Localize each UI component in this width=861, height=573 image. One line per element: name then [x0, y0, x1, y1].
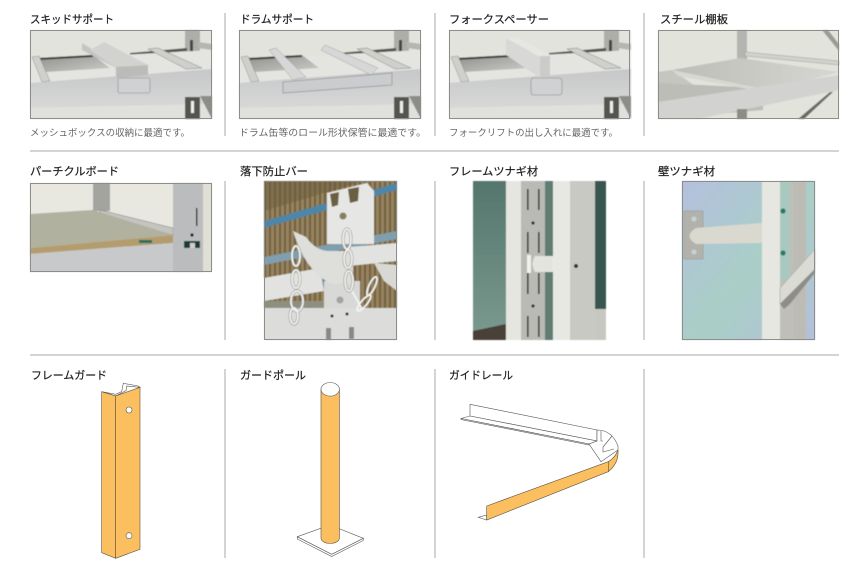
caption: メッシュボックスの収納に最適です。 [30, 127, 190, 139]
panel: drum support [239, 13, 426, 139]
panel: fork spacer [449, 13, 631, 139]
heading: ガードポール [240, 369, 306, 382]
photo: drum support [239, 30, 421, 119]
photo: fall prevention bar [264, 181, 397, 340]
heading: ガイドレール [449, 369, 513, 382]
heading: 落下防止バー [240, 164, 308, 178]
panel: fall prevention bar [240, 164, 397, 340]
heading: ドラムサポート [240, 13, 314, 26]
caption: ドラム缶等のロール形状保管に最適です。 [239, 127, 426, 139]
panel: frame connector [449, 164, 606, 340]
drawing: guard pole [297, 382, 363, 556]
panel: wall connector [658, 164, 815, 340]
heading: スチール棚板 [660, 12, 728, 26]
drawing: guide rail [461, 404, 618, 520]
heading: スキッドサポート [30, 13, 114, 26]
photo: fork spacer [449, 30, 631, 119]
drawing: frame guard [102, 383, 140, 558]
photo: steel shelf [658, 30, 839, 119]
panel: frame guard [31, 369, 140, 558]
heading: パーチクルボード [30, 165, 119, 178]
panel: skid support [30, 13, 212, 139]
heading: フレームツナギ材 [449, 164, 538, 178]
photo: frame connector [473, 181, 606, 340]
heading: 壁ツナギ材 [658, 164, 715, 178]
panel: guide rail [449, 369, 618, 520]
panel: guard pole [240, 369, 363, 556]
photo: particle board [30, 183, 212, 272]
photo: skid support [30, 30, 212, 119]
heading: フォークスペーサー [449, 13, 549, 26]
heading: フレームガード [31, 369, 107, 382]
photo: wall connector [682, 181, 815, 340]
panel: particle board [30, 165, 212, 272]
caption: フォークリフトの出し入れに最適です。 [449, 127, 618, 139]
panel: steel shelf [658, 12, 839, 119]
